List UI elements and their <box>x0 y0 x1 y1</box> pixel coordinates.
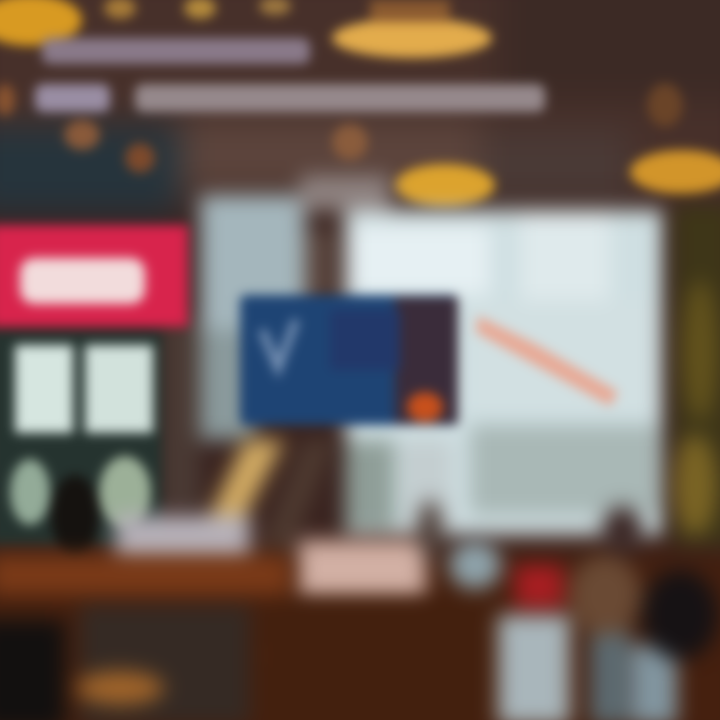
ceiling lamps <box>0 0 720 206</box>
credit card <box>240 295 458 425</box>
red sign <box>0 225 188 327</box>
window panels <box>160 175 663 535</box>
foreground counter and figures <box>0 506 718 720</box>
floor glow and pale diagonals <box>115 440 442 598</box>
blurred title lines <box>35 38 545 112</box>
right side foliage <box>673 205 720 545</box>
left lower panel <box>0 330 162 555</box>
pink streak on window <box>476 316 618 406</box>
